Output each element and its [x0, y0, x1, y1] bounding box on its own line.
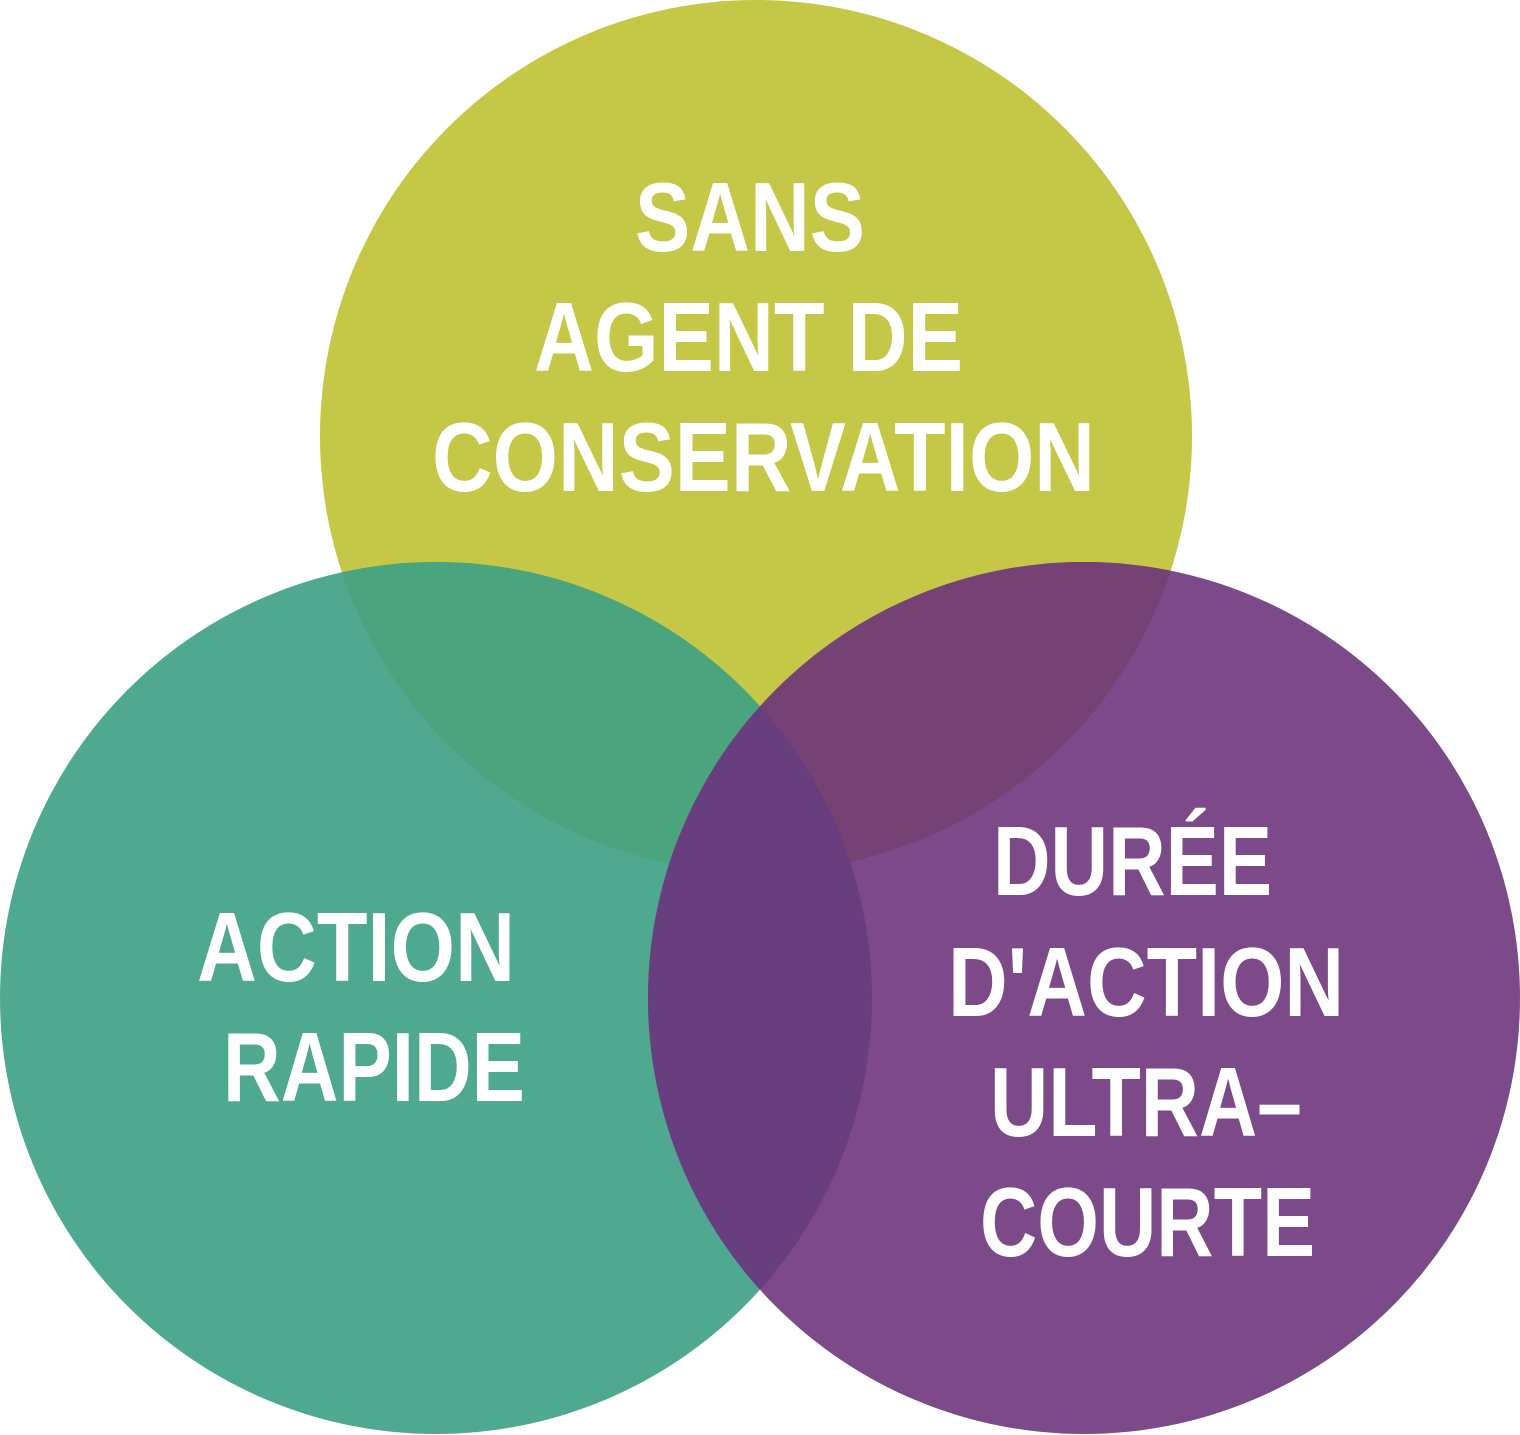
- label: durée d'action ultra-courte: COURTE: [980, 1167, 1315, 1277]
- circle: sans agent de conservation: [320, 0, 1192, 872]
- circle: action rapide: [0, 562, 872, 1434]
- label: durée d'action ultra-courte: [948, 806, 1344, 1277]
- label: action rapide: ACTION: [197, 892, 515, 1002]
- overlap: top and right: [669, 562, 1171, 864]
- label: durée d'action ultra-courte: D'ACTION: [948, 927, 1344, 1037]
- circle: durée d'action ultra-courte: [648, 562, 1520, 1434]
- label: sans agent de conservation: SANS: [635, 162, 865, 272]
- label: action rapide: RAPIDE: [223, 1012, 525, 1122]
- label: action rapide: [197, 892, 525, 1122]
- label: sans agent de conservation: AGENT DE: [534, 282, 963, 392]
- label: sans agent de conservation: CONSERVATION: [432, 402, 1095, 512]
- overlap: top and left: [342, 562, 760, 863]
- overlap: left and right: [648, 706, 872, 1290]
- label: durée d'action ultra-courte: DURÉE: [993, 806, 1272, 916]
- label: durée d'action ultra-courte: ULTRA–: [990, 1047, 1302, 1157]
- label: sans agent de conservation: [432, 162, 1095, 512]
